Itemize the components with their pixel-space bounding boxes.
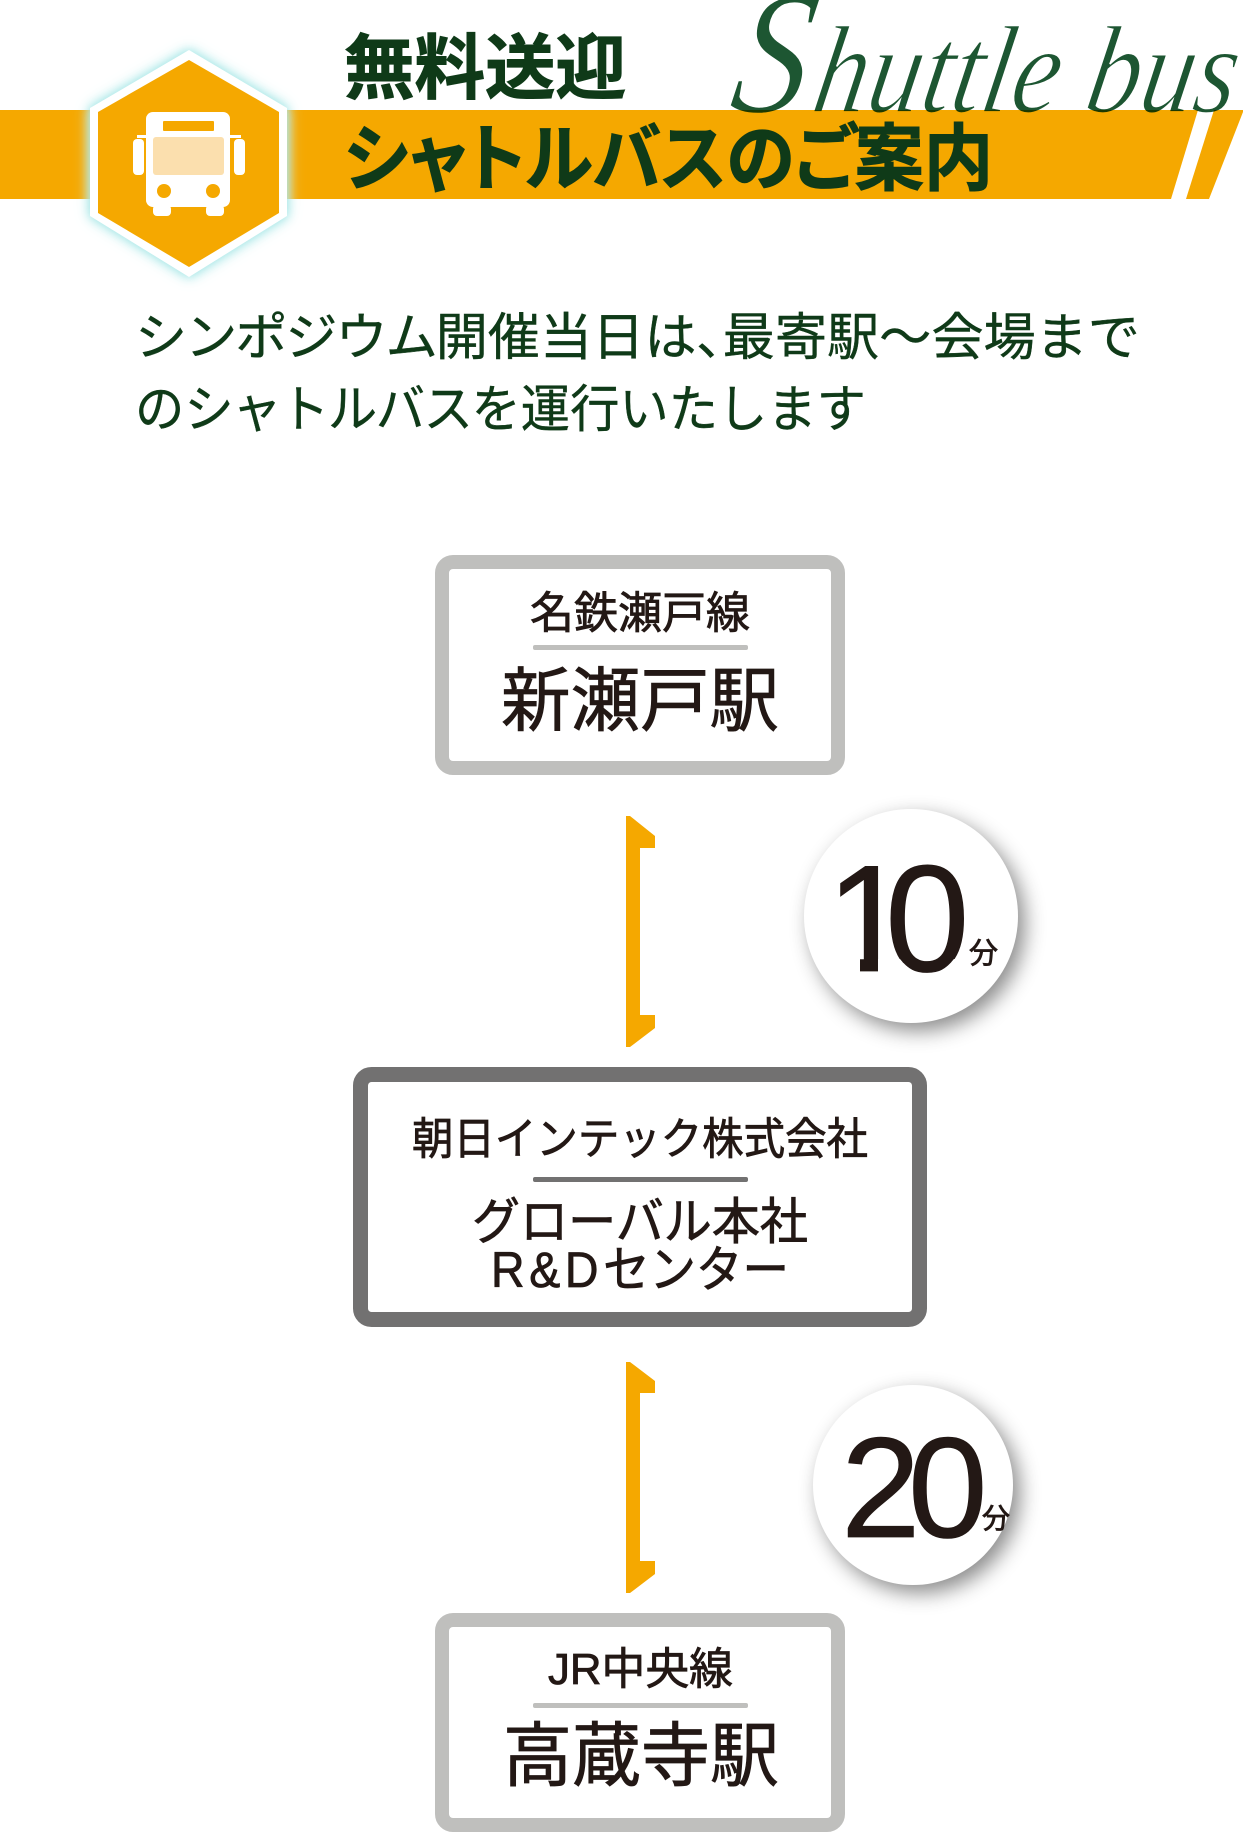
heading: shuttle bus guide: シャトルバスのご案内 <box>344 119 993 200</box>
intro text: のシャトルバスを運行いたします <box>135 381 866 438</box>
panel: Kozoji station <box>442 1620 838 1825</box>
panel: Shin-Seto station: 新瀬戸駅 <box>501 662 779 740</box>
intro text: シンポジウム開催当日は、最寄駅～会場まで <box>135 309 1140 366</box>
heading: free shuttle: 無料送迎 <box>344 30 626 109</box>
badge: 10 minutes <box>804 809 1018 1023</box>
panel: Kozoji station: 高蔵寺駅 <box>503 1717 779 1795</box>
arrow: 10 minute route <box>626 816 655 1047</box>
badge: 20 minutes: 20 <box>841 1409 988 1568</box>
badge: 20 minutes: 分 <box>982 1503 1010 1534</box>
badge: 20 minutes <box>813 1385 1013 1585</box>
arrow: 20 minute route <box>626 1362 655 1593</box>
badge: 10 minutes: 10 <box>826 834 970 1004</box>
intro text <box>135 309 1140 438</box>
panel: Asahi Intecc global headquarters <box>360 1074 920 1320</box>
badge: 10 minutes: 分 <box>969 938 998 970</box>
panel: Asahi Intecc global headquarters: 朝日インテック株式会社 <box>412 1115 868 1164</box>
panel: Kozoji station: JR中央線 <box>548 1645 733 1694</box>
header band <box>0 110 1243 199</box>
panel: Asahi Intecc global headquarters: R&Dセンター <box>491 1242 789 1298</box>
panel: Shin-Seto station: 名鉄瀬戸線 <box>530 589 750 638</box>
panel: Asahi Intecc global headquarters: グローバル本社 <box>472 1194 808 1250</box>
panel: Shin-Seto station <box>442 562 838 768</box>
icon: bus in hexagon <box>90 50 287 277</box>
